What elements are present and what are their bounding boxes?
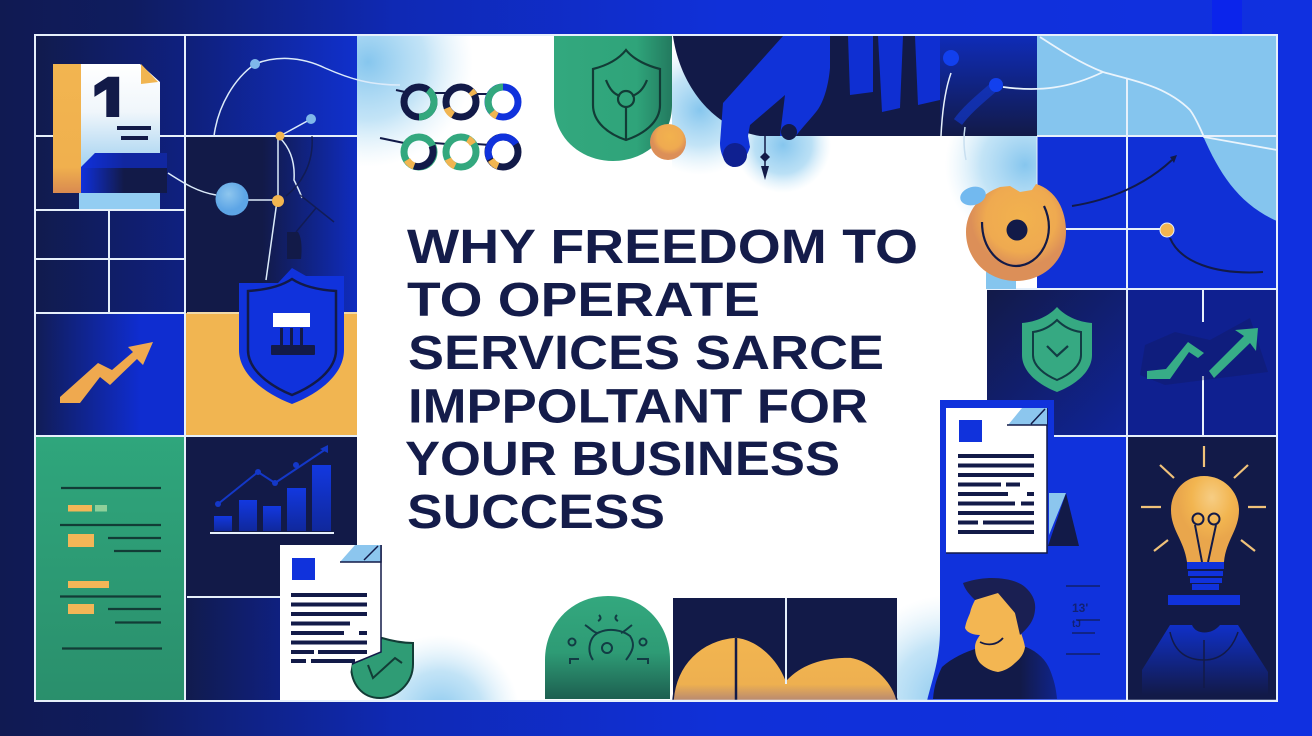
icon: green shield check bbox=[1022, 307, 1092, 392]
small annotation: tJ bbox=[1072, 619, 1081, 630]
title: SERVICES SARCE bbox=[408, 327, 884, 380]
icon: green shield behind document bbox=[351, 638, 413, 698]
icon: green shield on arch bbox=[554, 35, 672, 161]
title: WHY FREEDOM TO bbox=[407, 221, 918, 274]
soft blue glows bbox=[357, 35, 1037, 701]
panel: yellow hills bbox=[673, 598, 897, 700]
bottom frame line bbox=[545, 700, 1277, 702]
panel: network top cell bbox=[185, 35, 357, 136]
curved white lines bbox=[1003, 37, 1277, 150]
title: IMPPOLTANT FOR bbox=[408, 380, 868, 434]
title: YOUR BUSINESS bbox=[405, 433, 840, 486]
panel: person blue background bbox=[927, 400, 1127, 701]
yellow node and curve bbox=[1160, 223, 1263, 272]
icon: document with number one: 1 bbox=[91, 64, 131, 144]
icon: document with number one bbox=[53, 64, 167, 209]
panel: chart cell bbox=[185, 436, 357, 597]
panel: shield cell bbox=[987, 289, 1127, 436]
top right highlight bbox=[1212, 0, 1242, 34]
panel: arrow cell bbox=[35, 313, 185, 436]
document lower left bbox=[280, 545, 381, 701]
icon: green arch with sun bbox=[545, 596, 670, 699]
document right bbox=[946, 408, 1047, 553]
panel: network lower cell bbox=[185, 136, 357, 313]
panel: blue cell with curved corner bbox=[1037, 136, 1277, 289]
grid lines left bbox=[35, 35, 357, 701]
panel: green list cell bbox=[35, 436, 185, 701]
network lines and nodes bbox=[168, 58, 400, 280]
dark arrow curve bbox=[1072, 155, 1177, 206]
small annotation: 13' bbox=[1072, 601, 1088, 615]
tent shape bbox=[1048, 493, 1079, 546]
icon: light bulb bbox=[1141, 446, 1268, 695]
panel: hand illustration bbox=[673, 36, 1037, 180]
grid lines right bbox=[987, 78, 1277, 701]
panel: light blue top right bbox=[1037, 35, 1277, 137]
orange sphere bbox=[650, 124, 686, 160]
icon: rising orange arrow bbox=[60, 342, 153, 403]
small annotation bbox=[1066, 586, 1100, 654]
green list content bbox=[60, 488, 162, 648]
panel: yellow cell bbox=[185, 313, 357, 436]
title: TO OPERATE bbox=[407, 274, 760, 327]
bar chart bbox=[210, 445, 334, 534]
icon: person bbox=[933, 578, 1057, 699]
panel: lower blue cell bbox=[185, 597, 281, 701]
orange disc with target bbox=[958, 184, 1066, 289]
panel: bulb cell bbox=[1127, 436, 1277, 701]
title bbox=[405, 221, 918, 539]
panel: trend arrows cell bbox=[1127, 289, 1277, 436]
panel: top-left dark cell bbox=[35, 35, 185, 313]
center white panel bbox=[281, 35, 1037, 701]
icon: blue shield with column bbox=[239, 268, 344, 404]
title: SUCCESS bbox=[407, 486, 665, 539]
icon: green trend arrows bbox=[1140, 318, 1268, 385]
chain of rings bbox=[380, 87, 518, 167]
